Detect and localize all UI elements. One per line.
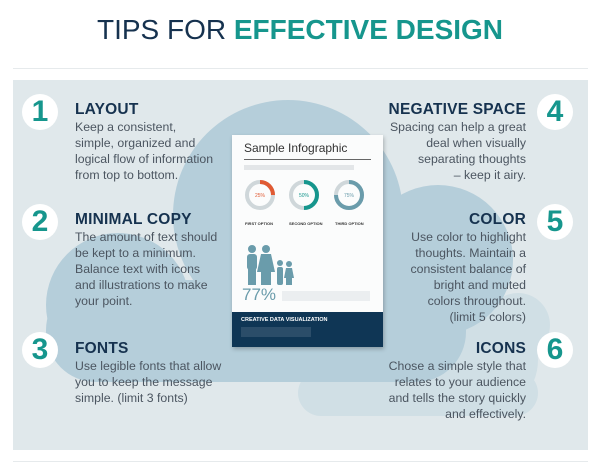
tip 6: icons: and effectively. <box>445 407 526 421</box>
tip 1: layout: LAYOUT <box>75 101 138 118</box>
tip 2 number: 2 <box>32 205 48 238</box>
title: TIPS FOR EFFECTIVE DESIGN <box>97 14 503 45</box>
tip 1: layout: from top to bottom. <box>75 168 178 182</box>
tip 2: minimal copy: and illustrations to make <box>75 278 208 292</box>
sample infographic card: SECOND OPTION <box>289 221 323 226</box>
tip 5: color: thoughts. Maintain a <box>415 246 526 260</box>
tip 5: color: COLOR <box>469 211 526 228</box>
tip 3: fonts: Use legible fonts that allow <box>75 359 221 373</box>
tip 5 number: 5 <box>547 205 563 238</box>
tip 1 number <box>22 94 58 130</box>
navy footer <box>232 312 383 347</box>
tip 4: negative space: – keep it airy. <box>454 168 526 182</box>
navy footer: CREATIVE DATA VISUALIZATION <box>241 317 327 323</box>
tip 5 number <box>537 204 573 240</box>
people icons <box>247 245 294 285</box>
donut charts: 25% <box>255 193 266 199</box>
tip 3 number: 3 <box>32 333 48 366</box>
tip 4: negative space: Spacing can help a great <box>390 120 526 134</box>
tip 6 number <box>537 332 573 368</box>
tip 5: color: colors throughout. <box>428 294 526 308</box>
tip 1 number: 1 <box>32 95 48 128</box>
donut charts: 75% <box>344 193 355 199</box>
tip 3: fonts: you to keep the message <box>75 375 212 389</box>
stat 77%: 77% <box>242 285 276 304</box>
tip 5: color: consistent balance of <box>410 262 526 276</box>
tip 4: negative space: separating thoughts <box>418 152 526 166</box>
sample infographic card <box>232 135 383 347</box>
tip 1: layout: Keep a consistent, <box>75 120 176 134</box>
tip 5: color: (limit 5 colors) <box>449 310 526 324</box>
tip 1: layout: simple, organized and <box>75 136 195 150</box>
tip 2: minimal copy <box>75 211 217 308</box>
sample infographic card: FIRST OPTION <box>245 221 273 226</box>
tip 6: icons: Chose a simple style that <box>389 359 526 373</box>
tip 5: color: Use color to highlight <box>411 230 526 244</box>
tip 6: icons: relates to your audience <box>395 375 526 389</box>
donut charts <box>245 180 364 210</box>
tip 6: icons: and tells the story quickly <box>389 391 526 405</box>
tip 1: layout: logical flow of information <box>75 152 213 166</box>
tip 4: negative space <box>389 101 526 182</box>
tip 3: fonts: FONTS <box>75 340 129 357</box>
tip 2: minimal copy: MINIMAL COPY <box>75 211 192 228</box>
sample infographic card: THIRD OPTION <box>335 221 364 226</box>
tip 4: negative space: NEGATIVE SPACE <box>389 101 526 118</box>
tip 4: negative space: deal when visually <box>426 136 526 150</box>
tip 6: icons <box>389 340 526 421</box>
tip 3 number <box>22 332 58 368</box>
tip 4 number: 4 <box>547 95 563 128</box>
donut charts: 50% <box>299 193 310 199</box>
tip 4 number <box>537 94 573 130</box>
tip 3: fonts <box>75 340 222 405</box>
tip 6 number: 6 <box>547 333 563 366</box>
tip 3: fonts: simple. (limit 3 fonts) <box>75 391 188 405</box>
tip 5: color <box>410 211 526 324</box>
tip 2: minimal copy: The amount of text should <box>75 230 217 244</box>
tip 6: icons: ICONS <box>476 340 526 357</box>
tip 2: minimal copy: be kept to a minimum. <box>75 246 196 260</box>
tip 2: minimal copy: your point. <box>75 294 132 308</box>
card heading: Sample Infographic <box>244 141 347 155</box>
tip 1: layout <box>75 101 213 182</box>
panel: background with clouds <box>13 80 588 450</box>
tip 2: minimal copy: Balance text with icons <box>75 262 200 276</box>
tip 5: color: bright and muted <box>434 278 526 292</box>
tip 2 number <box>22 204 58 240</box>
